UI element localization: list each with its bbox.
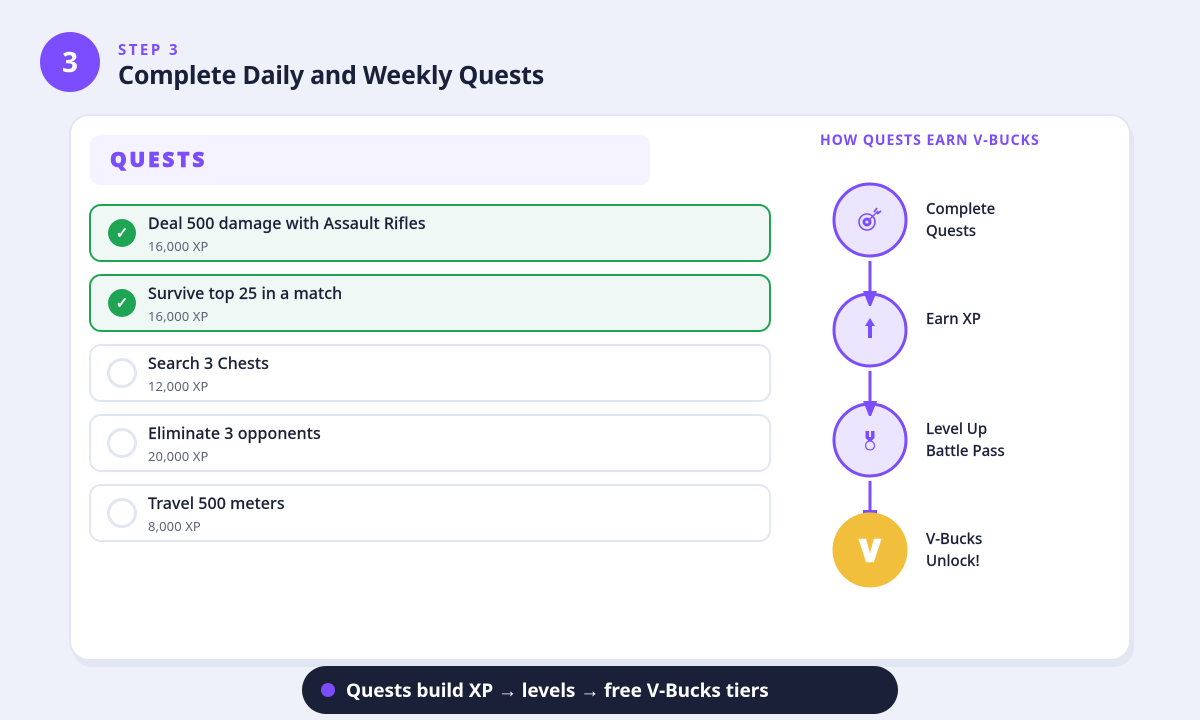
completed check: ✓ (116, 223, 128, 243)
quests heading: QUESTS (110, 146, 207, 174)
quest name: Eliminate 3 opponents (148, 422, 321, 444)
flow label: level up: Level Up (926, 419, 987, 439)
flow label: earn xp: Earn XP (926, 309, 981, 329)
quest xp: 16,000 XP (148, 237, 208, 255)
flow label: level up (926, 419, 1005, 461)
completed check: ✓ (116, 293, 128, 313)
v-bucks letter: V (859, 529, 882, 572)
arrow: quests to xp (863, 261, 877, 306)
quest xp: 16,000 XP (148, 307, 208, 325)
flow label: v-bucks: Unlock! (926, 551, 980, 571)
icon: up arrow (865, 318, 875, 338)
empty check (107, 498, 137, 528)
flow label: complete quests: Quests (926, 221, 976, 241)
completed check (108, 219, 136, 247)
step label: STEP 3 (118, 40, 180, 60)
quest name: Search 3 Chests (148, 352, 269, 374)
quest row: assault rifles (89, 204, 771, 262)
quest xp: 12,000 XP (148, 377, 208, 395)
quest xp: 8,000 XP (148, 517, 201, 535)
empty check (107, 428, 137, 458)
arrow: level to v-bucks (863, 481, 877, 514)
quest row: chests (89, 344, 771, 402)
step circle: earn xp (834, 294, 906, 366)
pill text: Quests build XP → levels → free V-Bucks tiers (346, 677, 769, 703)
flow label: complete quests (926, 199, 995, 241)
step circle: v-bucks (832, 512, 908, 588)
flow label: level up: Battle Pass (926, 441, 1005, 461)
step circle: level up (834, 404, 906, 476)
quest row: travel (89, 484, 771, 542)
arrow: xp to level (863, 371, 877, 416)
flow label: v-bucks: V-Bucks (926, 529, 982, 549)
panel: quests header (90, 135, 650, 185)
empty check (107, 358, 137, 388)
completed check (108, 289, 136, 317)
flow label: v-bucks (926, 529, 982, 571)
step circle: complete quests (834, 184, 906, 256)
flow heading: HOW QUESTS EARN V-BUCKS (820, 131, 1040, 150)
step number badge (40, 32, 100, 92)
icon: target (859, 208, 881, 230)
step number badge: 3 (62, 43, 78, 81)
quest xp: 20,000 XP (148, 447, 208, 465)
title: Complete Daily and Weekly Quests (118, 58, 544, 92)
quest row: opponents (89, 414, 771, 472)
quest name: Travel 500 meters (148, 492, 285, 514)
quest row: survive (89, 274, 771, 332)
flow label: complete quests: Complete (926, 199, 995, 219)
quest name: Survive top 25 in a match (148, 282, 342, 304)
pill dot (321, 683, 335, 697)
takeaway pill (302, 666, 898, 714)
quest name: Deal 500 damage with Assault Rifles (148, 212, 426, 234)
panel: main card (69, 114, 1131, 661)
icon: medal (866, 431, 874, 450)
